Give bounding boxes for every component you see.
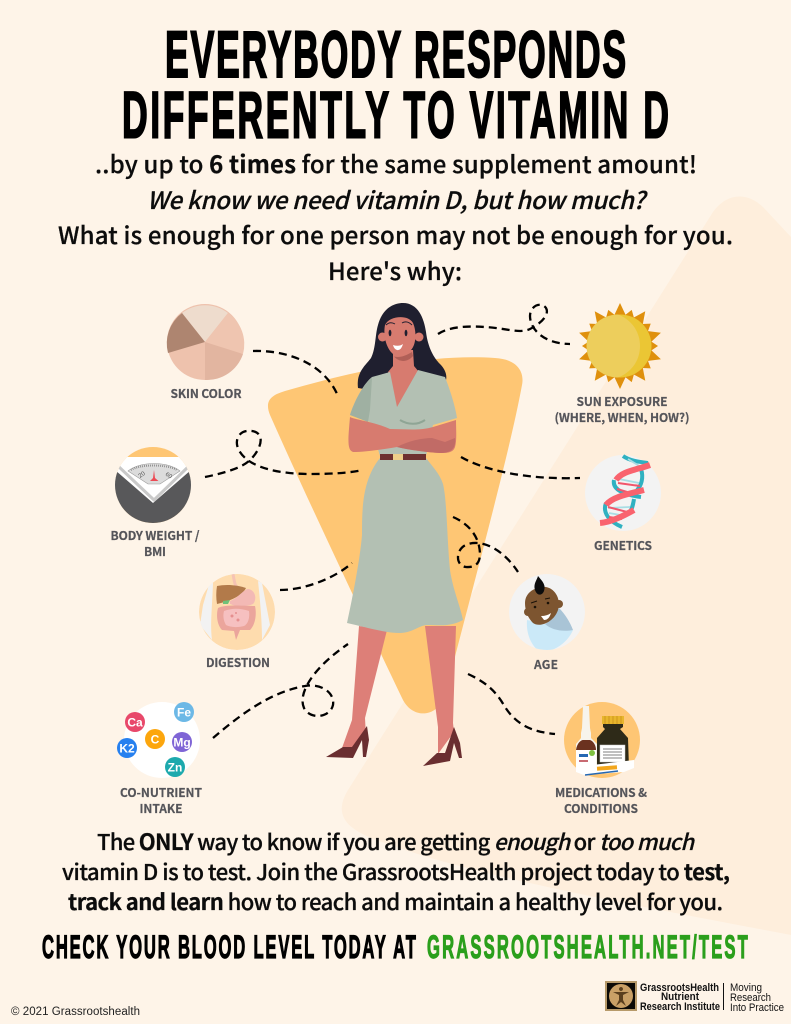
label: skin color: SKIN COLOR xyxy=(170,385,242,402)
logo xyxy=(605,981,784,1014)
icon: medications xyxy=(564,702,640,778)
label: co-nutrient intake xyxy=(120,784,202,817)
icon: sun xyxy=(577,303,663,389)
nutrient K2: K2 xyxy=(119,742,135,756)
belt buckle xyxy=(393,454,403,460)
icon: body weight scale: 60 xyxy=(164,472,173,481)
label: co-nutrient intake: INTAKE xyxy=(140,800,182,817)
logo tagline: Moving xyxy=(730,982,762,994)
eyes xyxy=(389,330,407,336)
label: digestion: DIGESTION xyxy=(206,654,270,671)
logo tagline: Into Practice xyxy=(730,1002,784,1014)
lower arm shade xyxy=(397,438,455,453)
icon: digestion xyxy=(199,574,275,650)
title: EVERYBODY RESPONDS xyxy=(165,19,626,92)
face xyxy=(384,317,415,356)
logo name: GrassrootsHealth xyxy=(640,982,719,994)
smile xyxy=(393,344,403,350)
logo name: Research Institute xyxy=(640,1001,720,1013)
label: medications xyxy=(555,784,647,817)
label: body weight: BMI xyxy=(144,543,166,560)
woman figure xyxy=(326,303,463,766)
ears xyxy=(378,332,424,342)
nutrient Zn: Zn xyxy=(168,760,182,774)
crossed arms xyxy=(348,417,456,453)
label: medications: MEDICATIONS & xyxy=(555,784,647,801)
label: body weight: BODY WEIGHT / xyxy=(110,527,200,544)
logo divider xyxy=(723,983,724,1010)
icon: body weight scale xyxy=(115,447,191,523)
nutrient Mg: Mg xyxy=(173,736,191,750)
title: DIFFERENTLY TO VITAMIN D xyxy=(122,79,669,152)
nutrient Fe: Fe xyxy=(177,706,191,720)
neck shadow xyxy=(394,352,413,361)
call to action xyxy=(42,930,748,966)
icon: genetics DNA xyxy=(585,455,661,531)
label: sun exposure xyxy=(554,393,690,426)
closing text xyxy=(62,825,730,917)
closing text: vitamin D is to test. Join the GrassrootsHealth project today to test, xyxy=(62,855,730,887)
label: sun exposure: SUN EXPOSURE xyxy=(576,393,668,410)
logo tagline: Research xyxy=(730,992,771,1004)
dashed connector: sun xyxy=(438,305,570,344)
intro text: ..by up to 6 times for the same supplement amount! xyxy=(95,145,697,180)
logo tagline xyxy=(730,982,784,1014)
label: genetics: GENETICS xyxy=(594,537,652,554)
logo name: Nutrient xyxy=(661,991,699,1003)
label: medications: CONDITIONS xyxy=(564,800,638,817)
nutrient Ca: Ca xyxy=(127,716,143,730)
dress fold xyxy=(400,420,425,424)
icon: co-nutrients xyxy=(117,702,200,778)
orange triangle behind figure xyxy=(268,357,523,713)
intro text: We know we need vitamin D, but how much? xyxy=(147,181,648,216)
dashed connector: genetics xyxy=(461,457,580,478)
call to action: GRASSROOTSHEALTH.NET/TEST xyxy=(427,930,748,966)
label: sun exposure: (WHERE, WHEN, HOW?) xyxy=(554,409,690,426)
legs xyxy=(342,626,456,754)
icon: body weight scale: 20 xyxy=(138,471,147,480)
intro text: What is enough for one person may not be enough for you. xyxy=(58,216,733,251)
dress bodice xyxy=(350,370,457,456)
label: co-nutrient intake: CO-NUTRIENT xyxy=(120,784,202,801)
skirt xyxy=(347,458,463,633)
dashed connector: co-nutrient xyxy=(213,644,348,738)
intro text xyxy=(58,145,733,287)
brows xyxy=(386,322,412,325)
call to action: CHECK YOUR BLOOD LEVEL TODAY AT xyxy=(42,930,416,966)
title xyxy=(122,19,669,152)
logo emblem xyxy=(605,981,637,1011)
neck and chest xyxy=(388,350,419,412)
dashed connector: medications xyxy=(468,674,555,734)
closing text: The ONLY way to know if you are getting enough or too much xyxy=(97,825,695,857)
label: age: AGE xyxy=(533,656,558,673)
logo name xyxy=(640,982,720,1013)
icon: skin color pie xyxy=(167,304,244,380)
dashed connector: digestion xyxy=(280,563,352,590)
icon: baby age xyxy=(509,574,585,652)
shoes xyxy=(326,726,462,766)
hair xyxy=(358,303,446,395)
belt xyxy=(380,454,426,460)
dashed connector: skin color xyxy=(253,351,338,396)
background shape: large pale triangle xyxy=(342,196,791,935)
dashed connector: body weight xyxy=(205,431,363,477)
nutrient C: C xyxy=(151,732,160,746)
sleeve shade xyxy=(350,378,372,422)
label: body weight xyxy=(110,527,200,560)
copyright: © 2021 Grassrootshealth xyxy=(11,1006,140,1018)
dashed connector: age xyxy=(453,517,518,572)
closing text: track and learn how to reach and maintain a healthy level for you. xyxy=(68,885,723,917)
intro text: Here's why: xyxy=(328,252,462,287)
